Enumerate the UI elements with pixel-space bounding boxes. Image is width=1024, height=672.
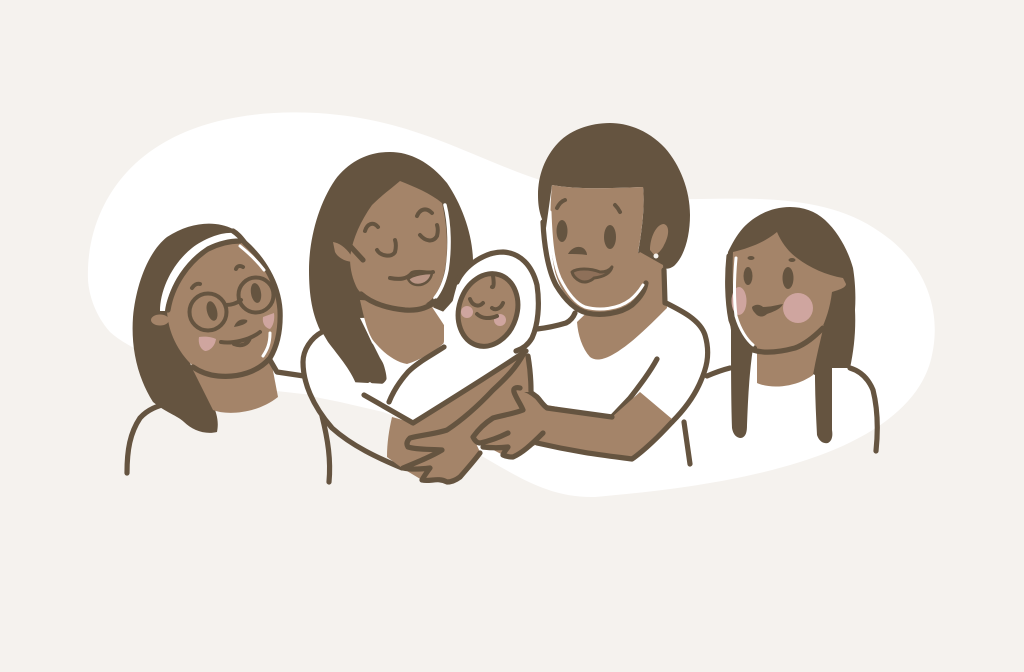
father mouth [572, 267, 612, 282]
mother lips [408, 273, 432, 285]
mother chin line [361, 294, 436, 310]
left girl mouth [221, 332, 260, 345]
baby hair curl [492, 276, 494, 287]
father earring [654, 254, 658, 258]
left girl face outline [168, 231, 280, 376]
baby cheeks [461, 306, 473, 318]
right girl shoulder [850, 368, 877, 451]
father white highlight [550, 212, 643, 309]
right girl neck [757, 325, 824, 387]
left girl face highlight [240, 246, 270, 356]
mother face [350, 181, 447, 310]
mother ear [333, 242, 354, 262]
right girl cheeks [783, 293, 813, 323]
person: right girl [707, 207, 877, 451]
left girl eyes [205, 300, 219, 322]
person: mother [303, 152, 473, 482]
left girl brows [192, 266, 243, 288]
mother white highlight [435, 205, 449, 298]
mother shirt [303, 317, 413, 423]
left girl face [167, 240, 279, 375]
right girl white highlight [734, 258, 753, 345]
left girl headband [160, 233, 238, 311]
father left shoulder [537, 313, 575, 329]
father shirt [530, 303, 707, 420]
father nose [568, 247, 587, 255]
right girl mouth [752, 304, 783, 317]
person: father [473, 123, 708, 464]
person: left girl with glasses [127, 224, 304, 473]
father neck [577, 252, 667, 360]
right girl arm [707, 368, 730, 376]
left girl ear [151, 314, 169, 326]
wrapped body [387, 352, 531, 482]
father arm [473, 388, 672, 459]
father shoulder and sleeve [666, 303, 708, 422]
swaddle edge [364, 351, 526, 423]
mother body line [322, 416, 330, 482]
baby in swaddle [364, 252, 543, 482]
mother arm outline [303, 332, 402, 468]
right girl eyes [744, 267, 752, 285]
left girl shoulder [127, 403, 168, 473]
swaddle fold [403, 353, 524, 482]
father brows [557, 200, 620, 212]
right girl face outline [728, 256, 823, 352]
right girl hair [727, 207, 855, 443]
father hand [473, 388, 543, 457]
baby mouth [477, 314, 497, 318]
swaddle outline [457, 252, 538, 351]
left girl hair [133, 224, 233, 433]
mother brows [365, 209, 432, 231]
mother neck [360, 300, 444, 364]
left girl arm [270, 360, 304, 376]
father eyes [556, 220, 568, 242]
swaddle [386, 252, 538, 423]
left girl glasses [190, 278, 274, 330]
right girl face [733, 232, 846, 351]
left girl cheeks [199, 337, 216, 351]
mother mouth [390, 272, 433, 279]
mother ear line [351, 247, 363, 260]
father face [550, 185, 648, 313]
right girl brows [748, 256, 754, 260]
father sleeve cuff [612, 359, 657, 417]
mother collar highlight [432, 307, 444, 325]
swaddle right edge [528, 356, 531, 391]
white background blob [88, 112, 935, 497]
baby face [449, 266, 527, 354]
father neck line [664, 270, 665, 303]
mother hair [309, 152, 473, 386]
mother closed eyes [377, 225, 438, 256]
father body line [684, 422, 690, 464]
father ear [650, 224, 668, 256]
father hair [538, 123, 690, 269]
left girl nose [234, 319, 247, 327]
father face outline [543, 222, 646, 314]
baby eyes [470, 299, 503, 309]
left girl neck [193, 350, 278, 413]
